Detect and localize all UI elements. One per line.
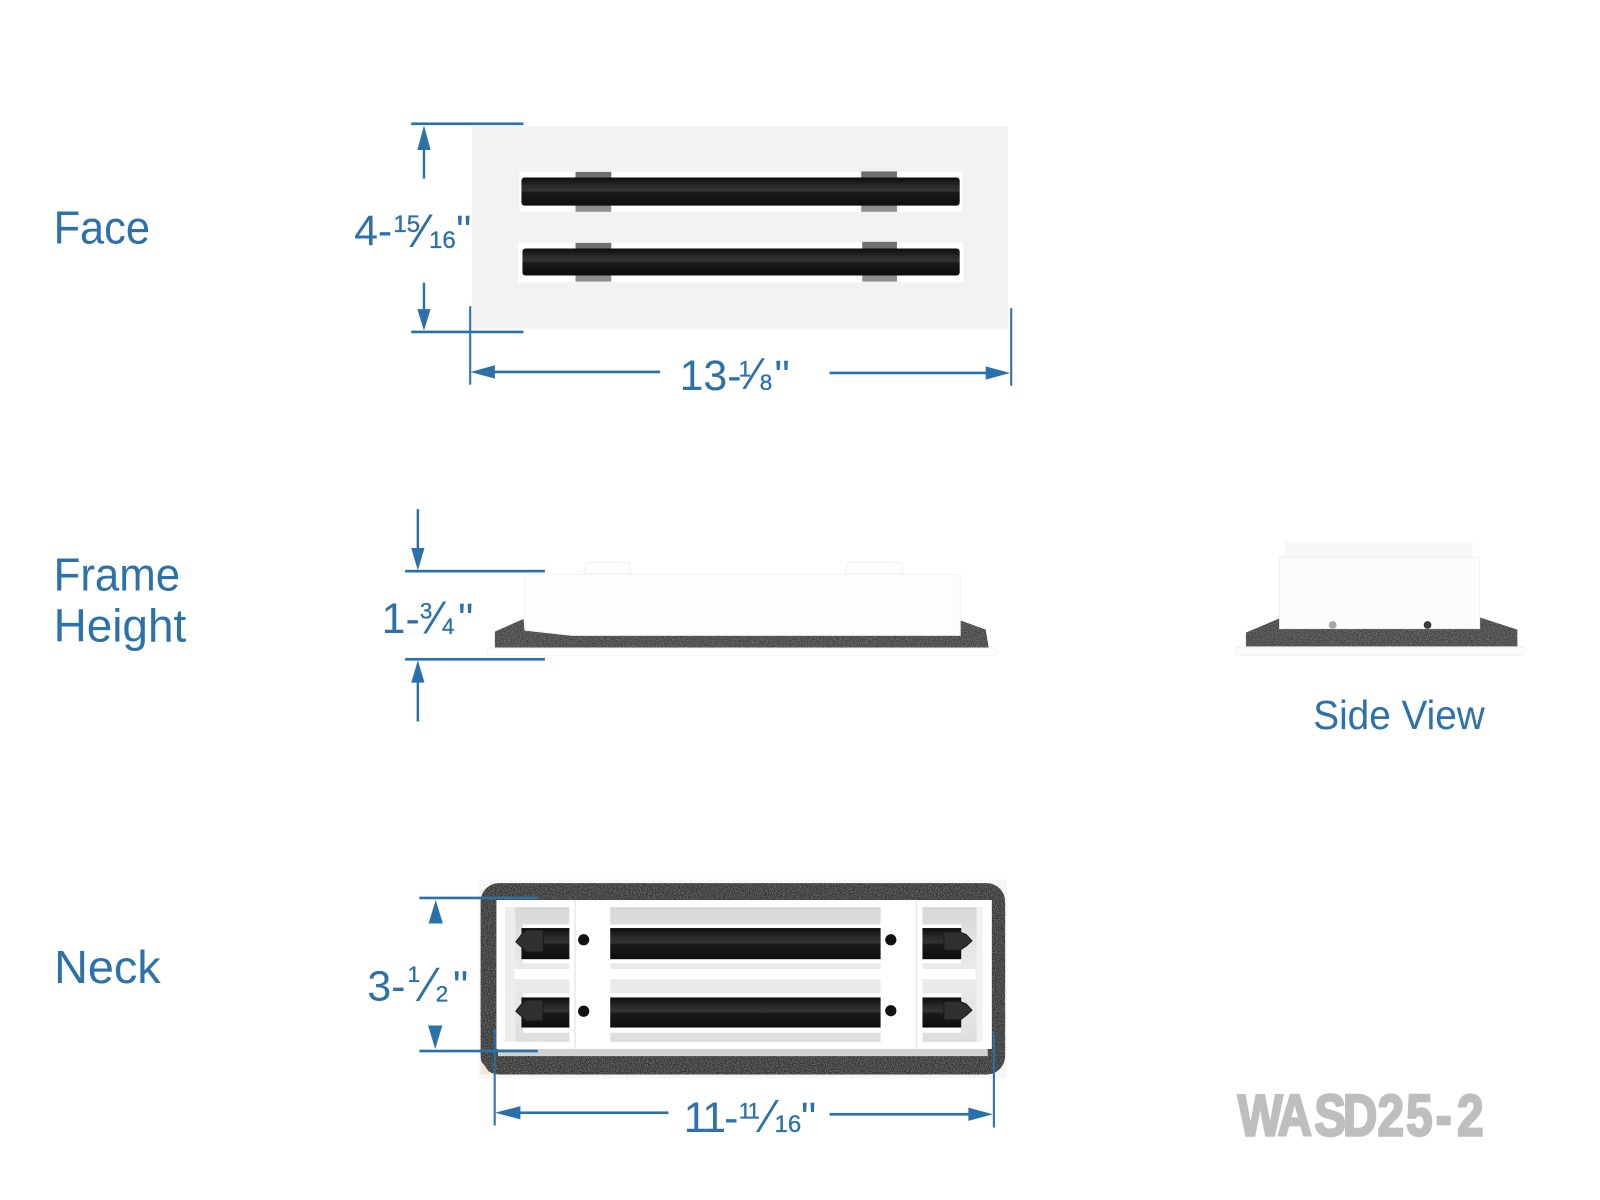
dimension: 11-11/16 inches: ⁄ [755, 1090, 779, 1142]
dimension: 4-15/16 inches: 4- [354, 207, 392, 255]
dimension: 3-1/2 inches: 2 [436, 982, 448, 1007]
dimension: 11-11/16 inches: 11- [684, 1094, 737, 1142]
dimension: 4-15/16 inches: 16 [429, 227, 456, 254]
neck rear view of the vent [479, 880, 1007, 1079]
label: Frame Height: Frame [54, 548, 180, 600]
label: Frame Height [54, 548, 186, 651]
dimension: 4-15/16 inches: ⁄ [409, 205, 433, 257]
dimension: 3-1/2 inches: 1 [408, 962, 420, 987]
dimension: 3-1/2 inches: " [453, 963, 468, 1011]
dimension: 1-3/4 inches: ⁄ [423, 592, 447, 644]
icon: right clips [944, 932, 972, 1020]
neck height dimension lines and arrows [419, 897, 538, 1052]
dimension: 4-15/16 inches: 15 [393, 211, 420, 238]
dimension: 3-1/2 inches: ⁄ [416, 959, 441, 1012]
label: Side View: Side View [1313, 692, 1485, 738]
dimension: 13-1/8 inches: ⁄ [742, 348, 766, 399]
dimension: 1-3/4 inches: 4 [442, 614, 454, 639]
side view of the vent [1236, 542, 1524, 655]
face view of the vent [472, 126, 1008, 329]
dimension: 11-11/16 inches: 16 [774, 1111, 801, 1138]
icon: left clips [516, 930, 543, 1021]
label: Neck: Neck [54, 941, 162, 993]
frame height side profile of the vent [487, 562, 997, 655]
model number: WASD25-2: WASD25-2 [1238, 1084, 1484, 1149]
label: Face: Face [54, 201, 150, 253]
dimension: 1-3/4 inches: 3 [420, 598, 432, 623]
face width dimension lines and arrows [469, 306, 1012, 386]
dimension: 1-3/4 inches: " [458, 595, 473, 643]
dimension: 1-3/4 inches: 1- [382, 595, 420, 643]
label: Frame Height: Height [54, 599, 186, 651]
dimension: 13-1/8 inches: 13- [680, 352, 742, 400]
dimension: 13-1/8 inches: " [774, 352, 790, 400]
dimension: 11-11/16 inches: 11 [739, 1098, 760, 1123]
dimension: 3-1/2 inches: 3- [367, 963, 405, 1011]
frame height dimension lines and arrows [405, 509, 545, 721]
dimension: 11-11/16 inches: " [801, 1094, 816, 1142]
mounting holes [578, 934, 896, 1017]
face height dimension lines and arrows [411, 122, 523, 333]
dimension: 13-1/8 inches: 1 [739, 357, 751, 382]
dimension: 4-15/16 inches: " [456, 207, 471, 255]
neck width dimension lines and arrows [494, 1029, 995, 1128]
dimension: 13-1/8 inches: 8 [760, 370, 772, 395]
